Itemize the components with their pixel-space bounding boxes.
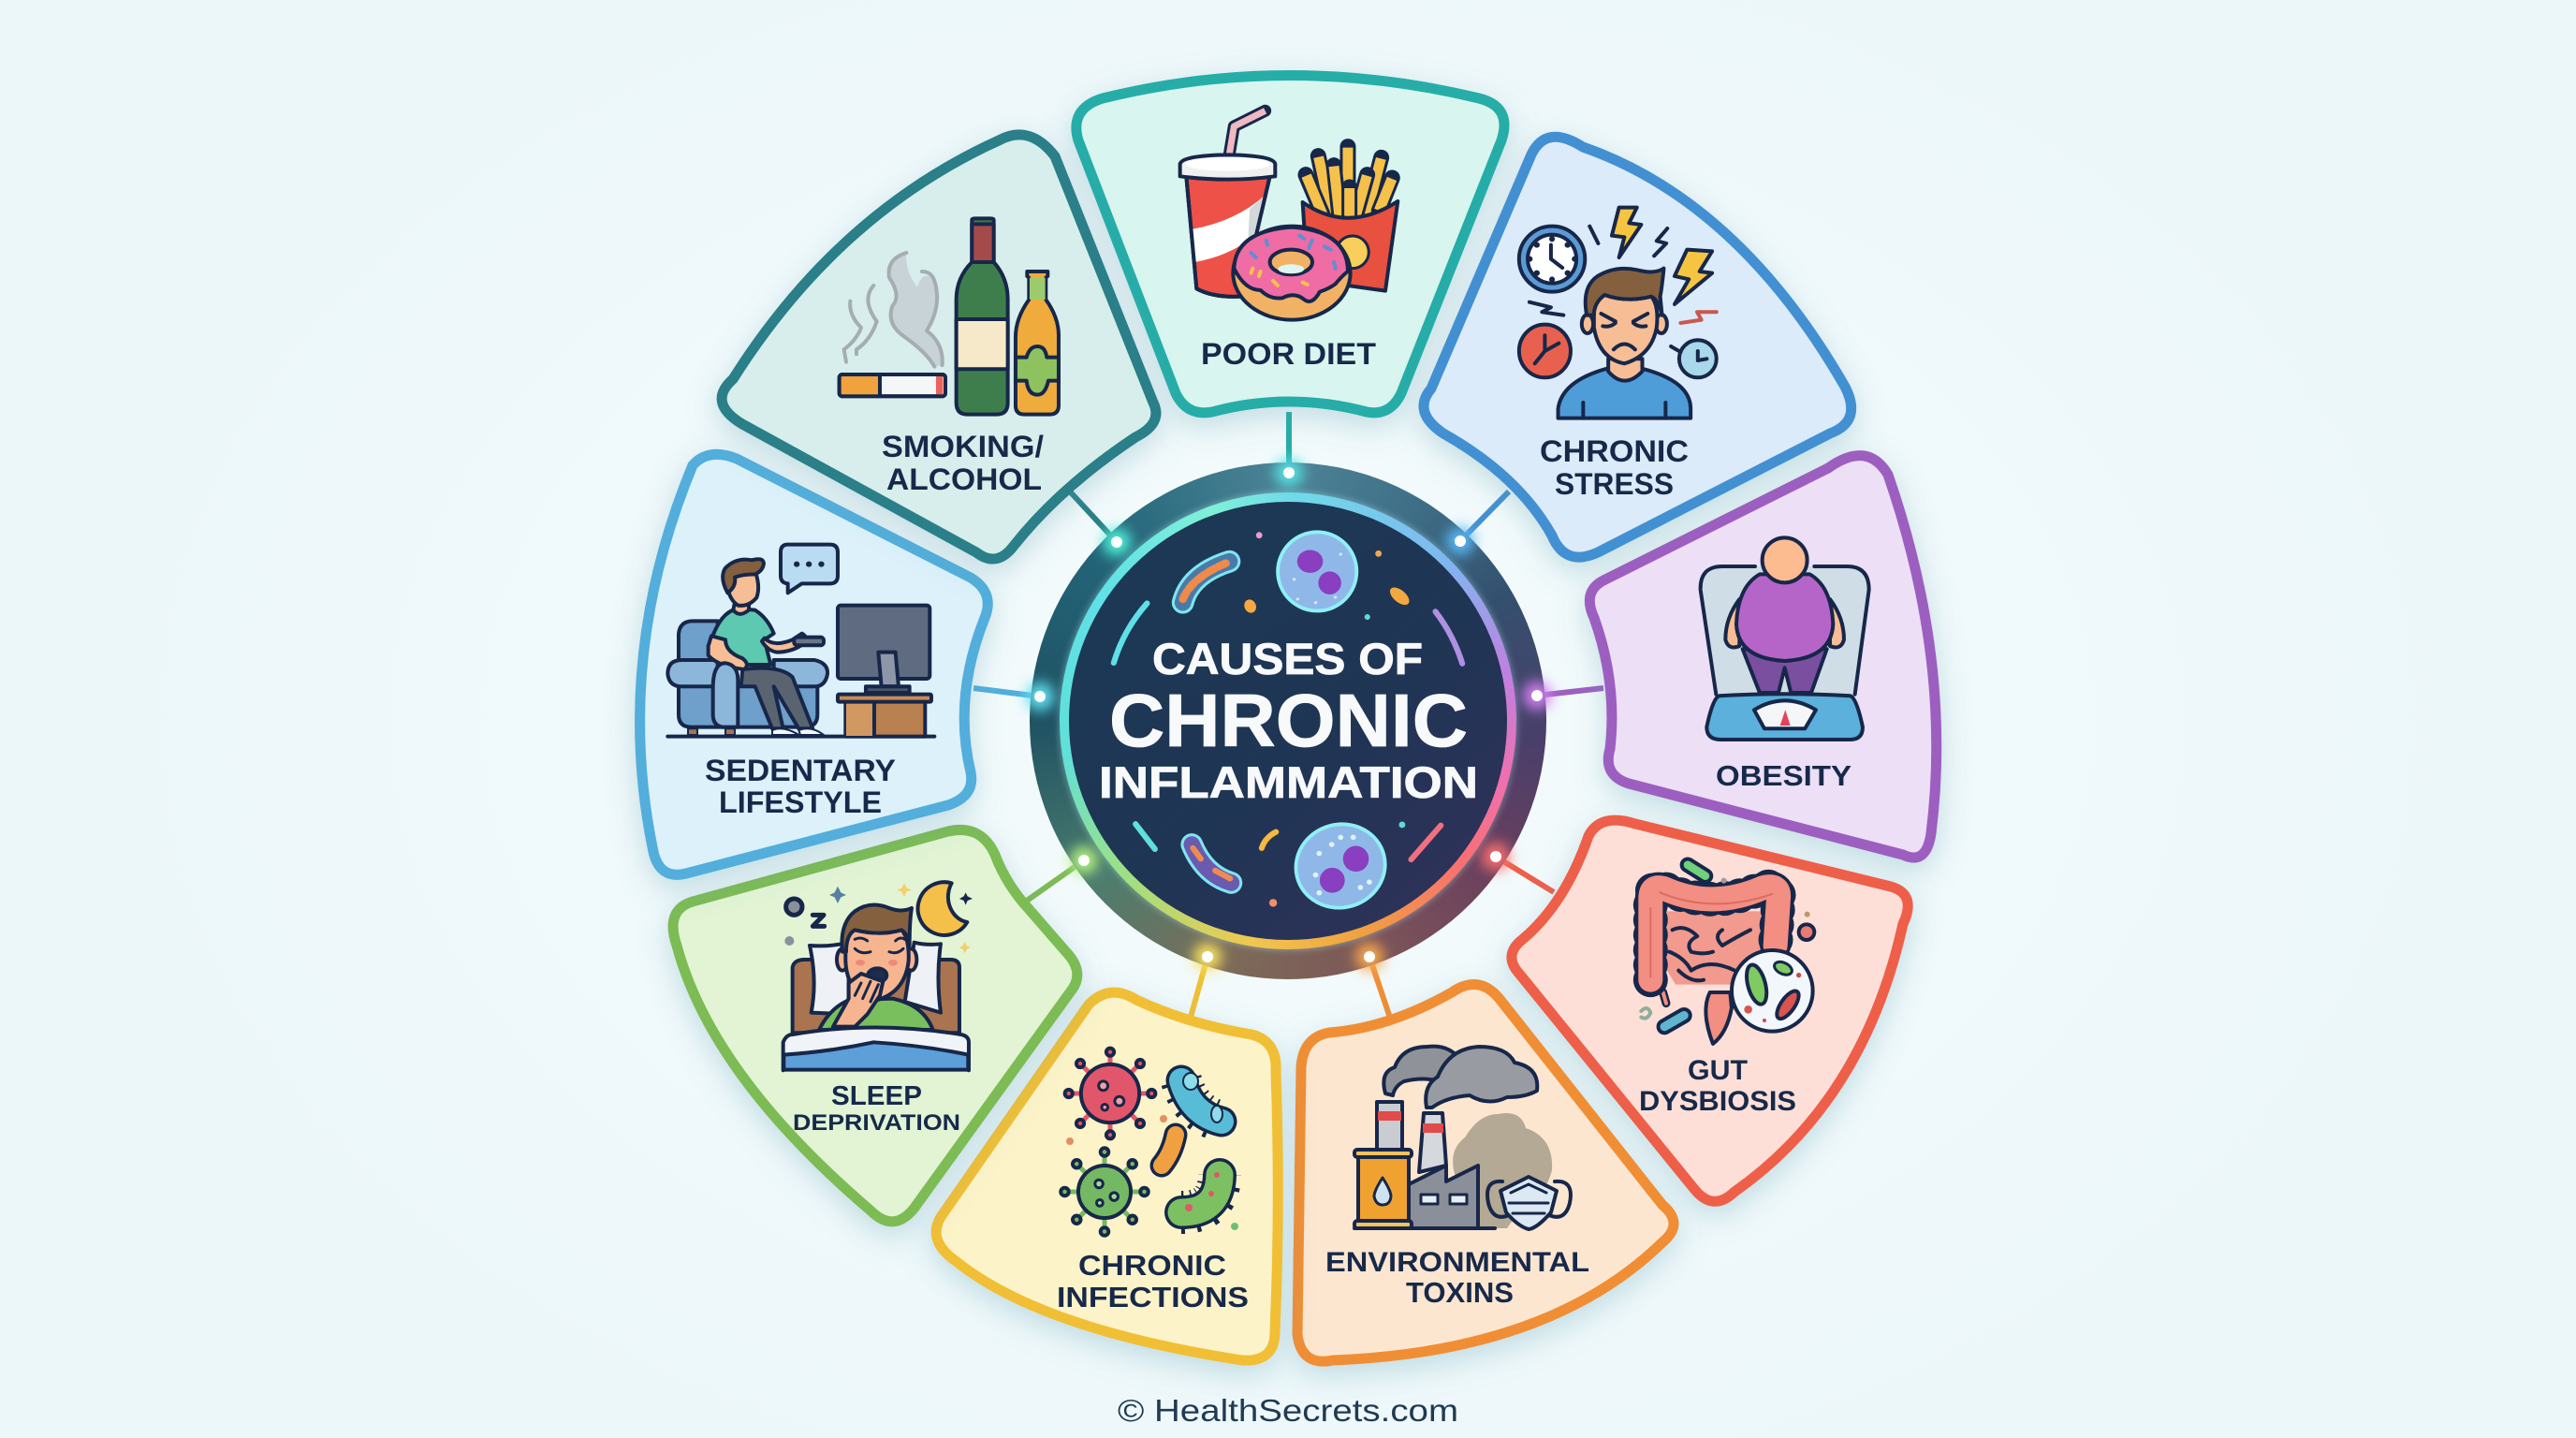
icon: yawning person in bed xyxy=(783,882,973,1070)
label: chronic infections xyxy=(1057,1249,1249,1313)
connector nodes xyxy=(1026,459,1551,971)
label: chronic stress: CHRONIC xyxy=(1540,434,1689,468)
label: gut dysbiosis: DYSBIOSIS xyxy=(1639,1086,1796,1117)
label: sedentary lifestyle xyxy=(705,754,896,819)
label: smoking and alcohol: SMOKING/ xyxy=(882,430,1044,463)
label: obesity: OBESITY xyxy=(1716,759,1852,792)
label: sleep deprivation: SLEEP xyxy=(831,1081,922,1111)
label: sedentary lifestyle: LIFESTYLE xyxy=(719,785,882,819)
icon: cigarette and bottles xyxy=(840,218,1059,415)
panel: chronic stress xyxy=(1424,137,1852,557)
icon: intestines with magnifier xyxy=(1641,857,1814,1044)
icon: drink, fries, donut xyxy=(1180,110,1398,320)
label: smoking and alcohol: ALCOHOL xyxy=(886,462,1042,496)
label: chronic stress: STRESS xyxy=(1555,467,1674,501)
label: chronic infections: INFECTIONS xyxy=(1057,1281,1249,1313)
panel: obesity xyxy=(1589,456,1937,858)
title: causes of chronic inflammation: INFLAMMATION xyxy=(1099,757,1478,807)
icon: stressed man with clocks xyxy=(1519,208,1717,418)
icon: viruses and bacteria xyxy=(1061,1049,1238,1236)
panel: sleep deprivation xyxy=(673,829,1077,1222)
panel: smoking and alcohol xyxy=(722,135,1156,559)
label: chronic infections: CHRONIC xyxy=(1078,1249,1226,1282)
label: gut dysbiosis xyxy=(1639,1055,1796,1117)
title: causes of chronic inflammation: CHRONIC xyxy=(1109,679,1468,762)
panel: environmental toxins xyxy=(1297,984,1674,1361)
label: environmental toxins: ENVIRONMENTAL xyxy=(1325,1247,1589,1278)
label: environmental toxins xyxy=(1325,1247,1589,1309)
panel: poor diet xyxy=(1076,75,1504,413)
credit: © HealthSecrets.com xyxy=(1118,1393,1458,1428)
label: sleep deprivation xyxy=(793,1081,960,1136)
panel: sedentary lifestyle xyxy=(640,454,988,874)
icon: person on sofa watching TV xyxy=(667,545,934,737)
label: gut dysbiosis: GUT xyxy=(1688,1055,1748,1086)
label: environmental toxins: TOXINS xyxy=(1406,1276,1514,1309)
icon: factory, smog and mask xyxy=(1354,1047,1571,1229)
panel: chronic infections xyxy=(936,992,1278,1360)
label: chronic stress xyxy=(1540,434,1689,501)
title: causes of chronic inflammation xyxy=(1099,634,1478,807)
hub illustrations: cells and bacteria xyxy=(1114,532,1462,917)
icon: person on scale xyxy=(1701,537,1869,740)
panel: gut dysbiosis xyxy=(1512,820,1908,1201)
label: poor diet: POOR DIET xyxy=(1201,337,1376,371)
connectors xyxy=(973,412,1603,1020)
central hub: ring xyxy=(1030,462,1546,979)
title: causes of chronic inflammation: CAUSES OF xyxy=(1152,634,1423,683)
label: sedentary lifestyle: SEDENTARY xyxy=(705,754,896,787)
label: smoking and alcohol xyxy=(882,430,1044,496)
label: sleep deprivation: DEPRIVATION xyxy=(793,1110,960,1136)
